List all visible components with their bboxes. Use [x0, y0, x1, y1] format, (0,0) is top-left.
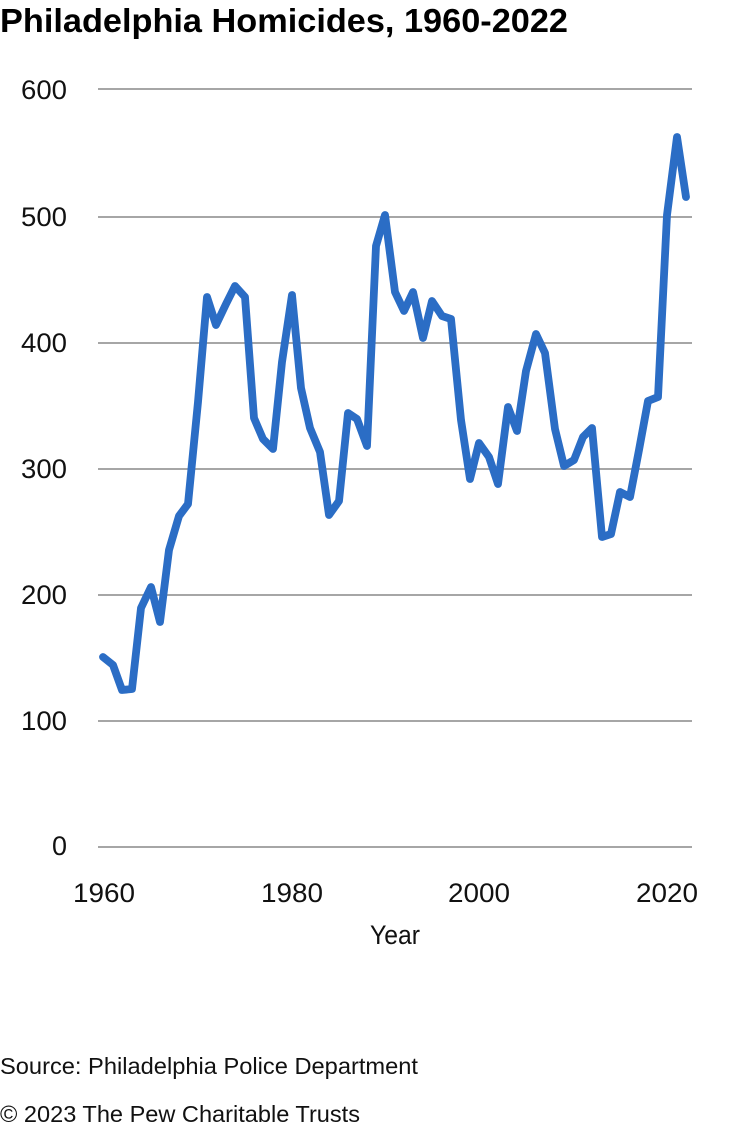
line series: homicides per year	[103, 137, 686, 690]
y axis labels: 500	[21, 202, 67, 232]
y axis labels: 100	[21, 706, 67, 736]
x axis labels: 1960	[73, 878, 135, 908]
y axis labels	[21, 75, 67, 861]
y axis labels: 600	[21, 75, 67, 105]
x axis labels: 2000	[448, 878, 510, 908]
title: Philadelphia Homicides, 1960-2022	[0, 2, 568, 39]
y axis labels: 200	[21, 580, 67, 610]
x axis labels	[73, 878, 698, 908]
y axis labels: 300	[21, 454, 67, 484]
y axis labels: 400	[21, 328, 67, 358]
copyright note: © 2023 The Pew Charitable Trusts	[0, 1101, 360, 1127]
x axis title: Year	[370, 920, 420, 950]
source note: Source: Philadelphia Police Department	[0, 1053, 419, 1079]
x axis labels: 1980	[261, 878, 323, 908]
x axis labels: 2020	[636, 878, 698, 908]
y axis labels: 0	[52, 831, 67, 861]
